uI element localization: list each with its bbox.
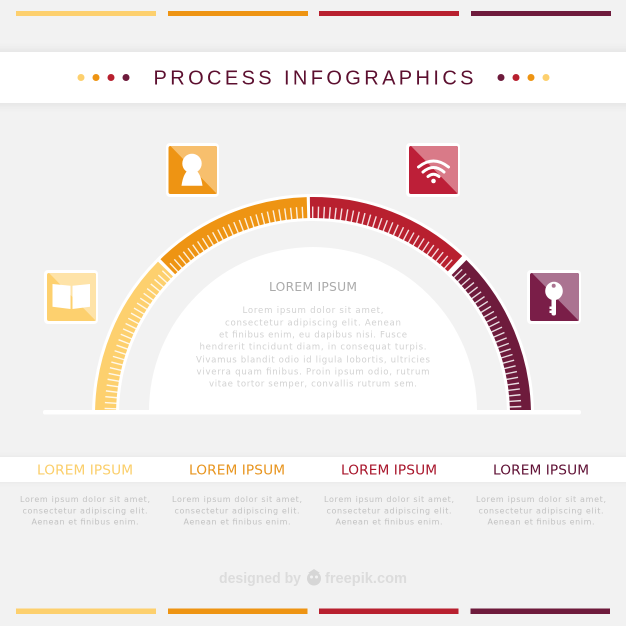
column text 4: consectetur adipiscing elit.: [478, 506, 604, 516]
icon: wifi: [406, 143, 460, 197]
gauge segment 4 plum: [457, 268, 520, 415]
central body text: et finibus enim, eu dapibus nisi. Fusce: [219, 330, 407, 340]
freepik credit: freepik.com: [325, 570, 407, 587]
gauge segment 1 yellow: [105, 269, 167, 415]
column heading 1: LOREM IPSUM: [37, 463, 133, 479]
central body text: Vivamus blandit odio id ligula lobortis, ultricies: [196, 356, 431, 366]
column text 1: Lorem ipsum dolor sit amet,: [20, 495, 150, 504]
central heading: LOREM IPSUM: [269, 280, 357, 294]
central body text: vitae tortor semper, convallis rutrum sem.: [209, 380, 417, 390]
icon: book: [44, 270, 98, 324]
central body text: viverra quam finibus. Proin ipsum odio, rutrum: [196, 368, 430, 378]
central body text: hendrerit tincidunt diam, in consequat turpis.: [200, 342, 426, 352]
central white semicircle panel: [149, 247, 477, 411]
gauge segment 2 orange: [168, 208, 307, 268]
column heading 4: LOREM IPSUM: [493, 463, 589, 479]
column text 4: Aenean et finibus enim.: [488, 518, 594, 526]
column text 1: [20, 495, 150, 526]
icon: freepik mascot: [307, 569, 321, 586]
gauge segment 3 red: [310, 207, 455, 266]
freepik credit: [219, 569, 407, 587]
semicircular process gauge: [105, 207, 520, 415]
central body text: Lorem ipsum dolor sit amet,: [242, 306, 384, 316]
column text 3: [324, 495, 454, 526]
title dots right: [498, 74, 550, 81]
icon: key: [527, 270, 581, 324]
column text 1: Aenean et finibus enim.: [32, 518, 138, 526]
column heading 2: LOREM IPSUM: [189, 463, 285, 479]
column text 2: consectetur adipiscing elit.: [174, 506, 300, 516]
column text 3: consectetur adipiscing elit.: [326, 506, 452, 516]
icon: person: [166, 143, 219, 197]
column heading band: [0, 457, 626, 482]
freepik credit: designed by: [219, 570, 302, 587]
title banner: [0, 52, 626, 103]
column text 1: consectetur adipiscing elit.: [22, 506, 148, 516]
column heading 3: LOREM IPSUM: [341, 463, 437, 479]
column text 3: Lorem ipsum dolor sit amet,: [324, 495, 454, 504]
bottom colour bars: [16, 608, 610, 614]
column text 4: [476, 495, 606, 526]
column text 2: Aenean et finibus enim.: [184, 518, 290, 526]
column text 2: Lorem ipsum dolor sit amet,: [172, 495, 302, 504]
title dots left: [78, 74, 130, 81]
title: PROCESS INFOGRAPHICS: [154, 68, 474, 90]
column text 3: Aenean et finibus enim.: [336, 518, 442, 526]
column text 4: Lorem ipsum dolor sit amet,: [476, 495, 606, 504]
base line: [43, 410, 581, 414]
central body text: [196, 306, 431, 390]
central body text: consectetur adipiscing elit. Aenean: [225, 318, 401, 328]
column text 2: [172, 495, 302, 526]
top colour bars: [16, 11, 611, 16]
